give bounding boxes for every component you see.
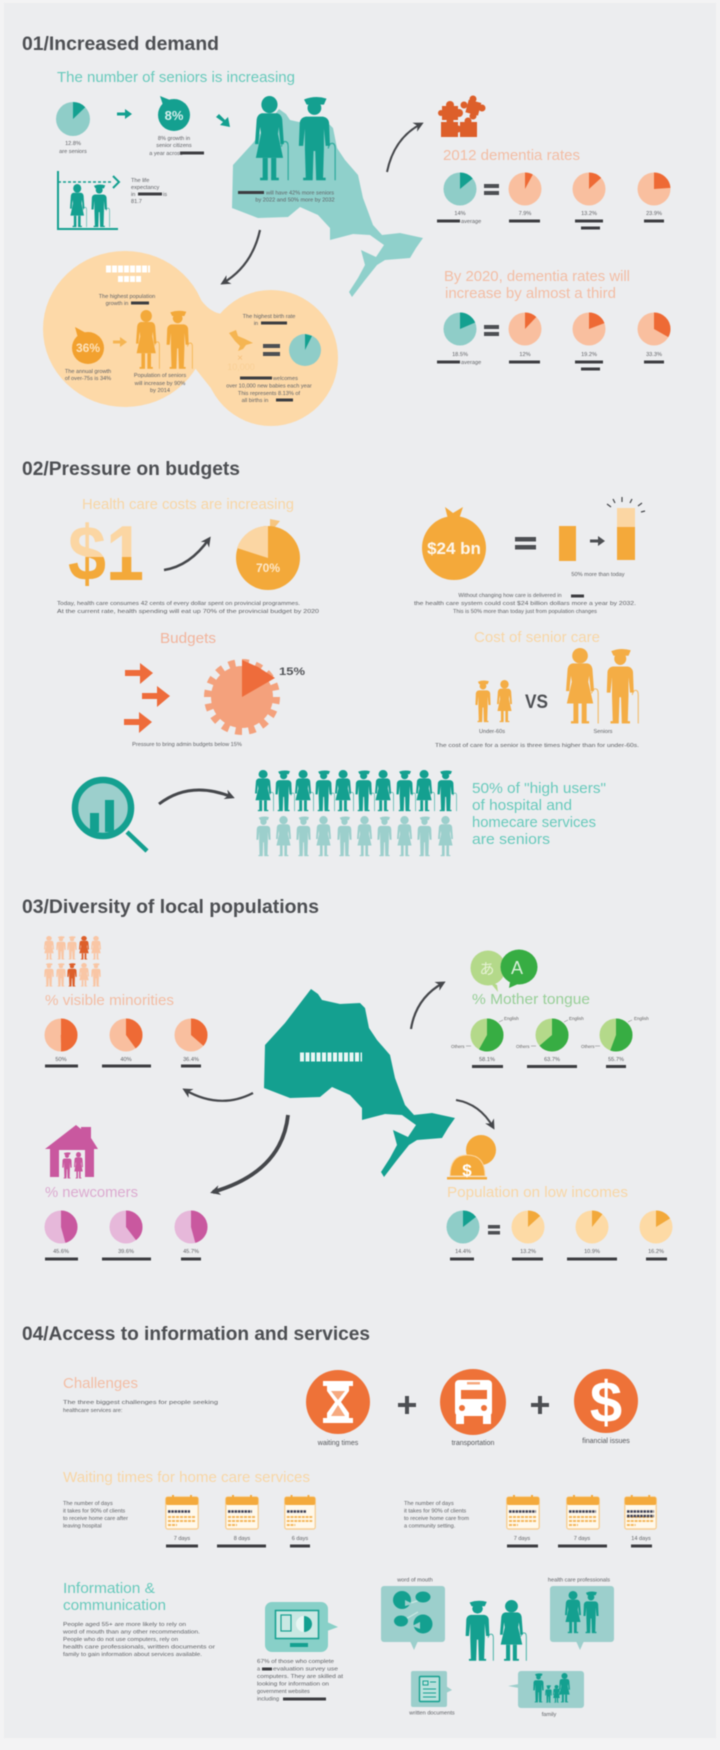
subheading: Budgets: Budgets bbox=[160, 630, 216, 647]
row: seniors highlighted bbox=[255, 770, 457, 811]
text: days after hospital bbox=[63, 1501, 128, 1530]
map: Ontario with seniors bbox=[232, 96, 423, 297]
pie: 63.7%: Others bbox=[516, 1044, 530, 1049]
calendar: 7 days second: 7 days bbox=[574, 1536, 590, 1542]
pie: 55.7%: 55.7% bbox=[608, 1057, 624, 1063]
equals sign bbox=[263, 344, 280, 356]
icon: senior figures bbox=[566, 648, 638, 735]
subheading: information and communication: communication bbox=[63, 1597, 166, 1614]
pie: 50%: 50% bbox=[55, 1057, 67, 1063]
text: days from community: The number of days bbox=[404, 1501, 454, 1507]
arrow: to minorities bbox=[185, 1090, 253, 1101]
subheading: mother tongue: % Mother tongue bbox=[472, 991, 590, 1008]
callout: 8% growth: senior citizens bbox=[156, 143, 192, 149]
chart: life expectancy: in bbox=[131, 192, 135, 198]
icon: under-60s figures: Under-60s bbox=[479, 729, 505, 735]
icon: monitor bubble bbox=[265, 1602, 338, 1652]
text: computers survey: evaluation survey use bbox=[273, 1666, 338, 1672]
text: information paragraph bbox=[62, 1622, 215, 1658]
pie: 63.7%: English bbox=[569, 1016, 584, 1021]
heading: 01 Increased demand: 01/Increased demand bbox=[22, 34, 219, 55]
chart: life expectancy: is bbox=[163, 192, 167, 198]
text: information paragraph: health care professionals, written documents or bbox=[63, 1644, 215, 1650]
symbol: plus bbox=[398, 1396, 416, 1414]
row: newcomers pies bbox=[44, 1210, 208, 1260]
pie: 13.2% bbox=[512, 1210, 544, 1260]
text: high users bbox=[472, 780, 606, 848]
text: days from community bbox=[404, 1501, 469, 1530]
callout: 8% growth bbox=[149, 96, 204, 157]
map: Ontario dark bbox=[264, 989, 455, 1177]
bubble: written documents: written documents bbox=[408, 1710, 455, 1716]
panel: regional population blob: growth in bbox=[106, 301, 128, 307]
text: information paragraph: People who do not use computers, rely on bbox=[63, 1637, 178, 1643]
text: information paragraph: word of mouth than any other recommendation. bbox=[62, 1630, 201, 1636]
chart: 50% more bars bbox=[559, 497, 645, 578]
text: computers survey: a bbox=[257, 1666, 261, 1672]
arrows: pressure bbox=[124, 663, 170, 733]
bubble: health care professionals bbox=[548, 1578, 614, 1650]
calendar: 7 days bbox=[166, 1495, 198, 1548]
pie: 12%: 12% bbox=[519, 352, 531, 358]
pie: 13.2% bbox=[572, 172, 606, 230]
text: high users: are seniors bbox=[472, 831, 550, 848]
pie: 12.8% are seniors bbox=[56, 102, 90, 155]
pie: provincial average bbox=[437, 172, 481, 225]
icon: magnifier with bars bbox=[75, 780, 147, 851]
panel: regional population blob bbox=[43, 251, 338, 426]
text: information paragraph: People aged 55+ are more likely to rely on bbox=[63, 1622, 186, 1628]
icon: house with newcomers bbox=[45, 1125, 98, 1180]
equals sign bbox=[484, 325, 499, 336]
icon: $24 bn money bag: $24 bn bbox=[427, 539, 481, 558]
icon: gear with 15% wedge bbox=[208, 660, 305, 731]
pie: 39.6% bbox=[102, 1210, 151, 1260]
icon: mother tongue bubbles: あ bbox=[479, 961, 495, 978]
pie: 36.4% bbox=[174, 1018, 208, 1068]
text: days after hospital: to receive home care after bbox=[63, 1516, 128, 1522]
pie: 23.9%: 23.9% bbox=[646, 211, 662, 217]
icon: waiting times hourglass bbox=[306, 1370, 370, 1447]
pie: 7.9% bbox=[508, 172, 542, 222]
arrow: teal diagonal bbox=[216, 114, 230, 127]
icon: gear with 15% wedge: 15% bbox=[279, 666, 305, 678]
subheading: number of seniors: The number of seniors is increasing bbox=[57, 69, 295, 86]
pie: 33.3%: 33.3% bbox=[646, 352, 662, 358]
panel: regional population blob: welcomes bbox=[272, 376, 298, 382]
subheading: by 2020 dementia bbox=[444, 268, 630, 302]
pie: 12.8% are seniors: 12.8% bbox=[65, 141, 81, 147]
map: Ontario with seniors: will have 42% more seniors bbox=[265, 190, 334, 196]
chart: 50% more bars: 50% more than today bbox=[571, 572, 625, 578]
panel: regional population blob: This represents 8.13% of bbox=[238, 391, 301, 397]
map: Ontario with seniors: by 2022 and 50% more by 2032 bbox=[255, 198, 335, 204]
pie: 55.7%: Others bbox=[581, 1044, 595, 1049]
icon: people visible minorities bbox=[44, 936, 101, 987]
subheading: waiting times: Waiting times for home care services bbox=[63, 1469, 310, 1486]
pie: 63.7% bbox=[516, 1016, 584, 1068]
pie: 39.6%: 39.6% bbox=[118, 1249, 134, 1255]
arrow: to high users bbox=[159, 790, 232, 804]
caption: admin budgets: Pressure to bring admin budgets below 15% bbox=[132, 742, 242, 748]
icon: financial issues: financial issues bbox=[582, 1438, 630, 1445]
equals sign bbox=[515, 537, 536, 550]
bubble: family bbox=[508, 1671, 584, 1718]
callout: 36% bbox=[72, 327, 104, 364]
figure: $1 two-tone: $1 bbox=[68, 509, 144, 597]
icon: waiting times hourglass: waiting times bbox=[317, 1440, 359, 1447]
calendar: 7 days community: 7 days bbox=[514, 1536, 530, 1542]
icon: coins bbox=[447, 1135, 496, 1180]
label: VS: VS bbox=[525, 692, 548, 713]
icon: financial issues: $ bbox=[590, 1370, 622, 1435]
panel: regional population blob: The annual growth bbox=[65, 369, 111, 375]
arrow: up to 70% bbox=[164, 539, 209, 570]
icon: transportation bus bbox=[440, 1369, 506, 1447]
symbol: plus bbox=[531, 1396, 549, 1414]
caption: $24 billion: This is 50% more than today just from population changes bbox=[453, 609, 597, 615]
text: days after hospital: leaving hospital bbox=[63, 1524, 102, 1530]
heading: 04 Access: 04/Access to information and services bbox=[22, 1324, 370, 1345]
icon: puzzle pieces bbox=[438, 96, 486, 137]
subheading: cost of senior care: Cost of senior care bbox=[474, 629, 600, 646]
subheading: by 2020 dementia: increase by almost a third bbox=[445, 285, 616, 302]
pie: provincial average: average bbox=[461, 219, 481, 225]
callout: 8% growth: a year across bbox=[149, 151, 183, 157]
equals sign bbox=[488, 1225, 500, 1234]
bubble: word of mouth: word of mouth bbox=[396, 1578, 433, 1584]
pie: 19.2%: 19.2% bbox=[581, 352, 597, 358]
text: high users: homecare services bbox=[472, 814, 596, 831]
callout: 36%: 36% bbox=[76, 341, 100, 355]
pie: 10.9% bbox=[567, 1210, 617, 1260]
calendar: 8 days: 8 days bbox=[234, 1536, 250, 1542]
pie: 45.6%: 45.6% bbox=[53, 1249, 69, 1255]
calendar: 14 days bbox=[625, 1495, 656, 1548]
pie: 23.9% bbox=[638, 172, 670, 222]
icon: mother tongue bubbles bbox=[470, 950, 538, 992]
chart: life expectancy: The life bbox=[131, 178, 149, 184]
bubble: written documents bbox=[408, 1671, 455, 1716]
arrow: to low incomes bbox=[456, 1100, 493, 1127]
pie: births bbox=[289, 334, 321, 366]
panel: regional population blob: all births in bbox=[242, 398, 268, 404]
subheading: challenges: Challenges bbox=[63, 1375, 138, 1392]
panel: regional population blob: 10,000 bbox=[227, 362, 255, 372]
calendar: 8 days bbox=[217, 1495, 266, 1548]
icon: orange seniors bbox=[136, 310, 192, 369]
text: computers survey: looking for information on bbox=[257, 1682, 329, 1688]
pie: 33.3% bbox=[638, 312, 670, 364]
callout: 8% growth: 8% growth in bbox=[158, 136, 190, 142]
pie: 63.7%: 63.7% bbox=[544, 1057, 560, 1063]
pie: 70% of budget: 70% bbox=[256, 561, 280, 575]
icon: central seniors bbox=[466, 1600, 526, 1661]
text: high users: 50% of "high users" bbox=[472, 780, 606, 797]
row: others faded bbox=[256, 816, 453, 856]
caption: cost of care: The cost of care for a senior is three times higher than for under-60s. bbox=[435, 743, 640, 749]
figure: $1 two-tone: $1 bbox=[68, 509, 144, 597]
pie: 13.2%: 13.2% bbox=[520, 1249, 536, 1255]
pie: 45.6% bbox=[44, 1210, 78, 1260]
text: computers survey bbox=[257, 1659, 344, 1702]
heading: 02 Pressure on budgets: 02/Pressure on budgets bbox=[22, 459, 240, 480]
pie: 13.2%: 13.2% bbox=[581, 211, 597, 217]
calendar: 7 days second bbox=[558, 1495, 607, 1548]
panel: regional population blob: will increase by 90% bbox=[134, 381, 185, 387]
heading: 03 Diversity: 03/Diversity of local populations bbox=[22, 897, 319, 918]
pie: provincial average 2020: average bbox=[461, 360, 481, 366]
pie: 7.9%: 7.9% bbox=[519, 211, 531, 217]
arrow: map to region blob bbox=[223, 230, 260, 283]
text: days from community: a community setting. bbox=[404, 1524, 456, 1530]
icon: coins: $ bbox=[462, 1161, 472, 1180]
icon: mother tongue bubbles: A bbox=[511, 958, 523, 978]
caption: $24 billion: the health care system could cost $24 billion dollars more a year by 2032. bbox=[414, 601, 637, 607]
pie: 16.2%: 16.2% bbox=[648, 1249, 664, 1255]
panel: regional population blob: × bbox=[237, 353, 243, 364]
pie: 36.4%: 36.4% bbox=[183, 1057, 199, 1063]
icon: financial issues bbox=[574, 1369, 638, 1445]
text: challenges intro bbox=[63, 1400, 218, 1414]
caption: $24 billion: Without changing how care is delivered in bbox=[458, 593, 562, 599]
text: days after hospital: The number of days bbox=[63, 1501, 113, 1507]
panel: regional population blob: by 2014 bbox=[150, 388, 170, 394]
caption: health budget: At the current rate, health spending will eat up 70% of the provincial budget by 2020 bbox=[57, 609, 319, 615]
equals sign bbox=[484, 184, 499, 195]
pie: 58.1%: English bbox=[504, 1016, 519, 1021]
text: computers survey: including bbox=[257, 1696, 279, 1702]
bubble: health care professionals: health care professionals bbox=[548, 1578, 610, 1584]
callout: 8% growth: 8% bbox=[165, 108, 184, 123]
chart: 50% icon array bbox=[255, 770, 457, 856]
text: days after hospital: it takes for 90% of clients bbox=[63, 1508, 125, 1514]
subheading: information and communication: Information & bbox=[63, 1580, 155, 1597]
calendar: 6 days bbox=[285, 1495, 315, 1548]
calendar: 7 days: 7 days bbox=[174, 1536, 190, 1542]
calendar: 6 days: 6 days bbox=[292, 1536, 308, 1542]
panel: regional population blob: in bbox=[254, 321, 258, 327]
calendar: 14 days: 14 days bbox=[631, 1536, 651, 1542]
arrow: orange bbox=[113, 337, 127, 347]
text: challenges intro: healthcare services are: bbox=[63, 1408, 123, 1414]
pie: 55.7% bbox=[581, 1016, 649, 1068]
pie: 12% bbox=[508, 312, 542, 364]
pie: 10.9%: 10.9% bbox=[584, 1249, 600, 1255]
pie: provincial average 2020: 18.5% bbox=[452, 352, 468, 358]
pie: 55.7%: English bbox=[634, 1016, 649, 1021]
bubble: family: family bbox=[542, 1712, 557, 1718]
subheading: visible minorities: % visible minorities bbox=[45, 992, 174, 1009]
panel: regional population blob: over 10,000 new babies each year bbox=[226, 384, 312, 390]
subheading: information and communication bbox=[63, 1580, 166, 1614]
pie: provincial average 2020 bbox=[437, 312, 481, 366]
subheading: 2012 dementia rates: 2012 dementia rates bbox=[443, 147, 580, 164]
subheading: by 2020 dementia: By 2020, dementia rates will bbox=[444, 268, 630, 285]
chart: life expectancy: expectancy bbox=[131, 185, 159, 191]
subheading: newcomers: % newcomers bbox=[45, 1184, 138, 1201]
pie: 58.1%: Others bbox=[451, 1044, 465, 1049]
icon: $24 bn money bag bbox=[422, 507, 486, 580]
text: information paragraph: family to gain information about services available. bbox=[63, 1652, 202, 1658]
pie: 40%: 40% bbox=[120, 1057, 132, 1063]
chart: life expectancy: 81.7 bbox=[131, 199, 142, 205]
row: visible minorities pies bbox=[44, 1018, 208, 1068]
row: mother tongue pies bbox=[451, 1016, 649, 1068]
text: computers survey: government websites bbox=[257, 1689, 310, 1695]
subheading: low incomes: Population on low incomes bbox=[447, 1184, 628, 1201]
pie: 19.2% bbox=[572, 312, 606, 370]
pie: 58.1% bbox=[451, 1016, 519, 1068]
pie: 58.1%: 58.1% bbox=[479, 1057, 495, 1063]
icon: transportation bus: transportation bbox=[452, 1440, 495, 1447]
pie: 12.8% are seniors: are seniors bbox=[59, 149, 87, 155]
text: computers survey: 67% of those who complete bbox=[257, 1659, 334, 1665]
icon: stork bbox=[229, 330, 253, 351]
pie: 45.7%: 45.7% bbox=[183, 1249, 199, 1255]
caption: health budget bbox=[57, 601, 319, 615]
pie: 70% of budget bbox=[236, 519, 300, 590]
row: low income pies bbox=[446, 1210, 672, 1260]
panel: regional population blob: of over-75s is 34% bbox=[65, 376, 111, 382]
pie: 14.4% bbox=[446, 1210, 480, 1260]
row: 2012 dementia pies bbox=[437, 172, 670, 230]
caption: $24 billion bbox=[414, 593, 637, 615]
pie: provincial average: 14% bbox=[454, 211, 466, 217]
row: 2020 dementia pies bbox=[437, 312, 670, 370]
text: days from community: to receive home care from bbox=[404, 1516, 469, 1522]
panel: regional population blob: The highest birth rate bbox=[243, 314, 295, 320]
chart: life expectancy bbox=[58, 171, 167, 229]
text: days from community: it takes for 90% of clients bbox=[404, 1508, 466, 1514]
icon: under-60s figures bbox=[475, 680, 512, 735]
calendar: 7 days community bbox=[507, 1495, 539, 1548]
figure: $1 two-tone bbox=[68, 522, 143, 587]
arrow: teal right bbox=[117, 109, 132, 119]
pie: 40% bbox=[102, 1018, 151, 1068]
panel: regional population blob: Population of seniors bbox=[134, 373, 186, 379]
arrow: map to dementia bbox=[387, 124, 421, 172]
text: challenges intro: The three biggest challenges for people seeking bbox=[63, 1400, 218, 1406]
bubble: word of mouth bbox=[381, 1578, 445, 1650]
panel: regional population blob: The highest population bbox=[99, 294, 155, 300]
arrow: to newcomers bbox=[213, 1115, 288, 1192]
pie: 16.2% bbox=[640, 1210, 672, 1260]
icon: senior figures: Seniors bbox=[594, 729, 613, 735]
text: computers survey: computers. They are skilled at bbox=[257, 1674, 344, 1680]
pie: 50% bbox=[44, 1018, 78, 1068]
caption: health budget: Today, health care consumes 42 cents of every dollar spent on provincial programmes. bbox=[57, 601, 300, 607]
arrow: to mother tongue bbox=[411, 983, 443, 1029]
pie: 14.4%: 14.4% bbox=[455, 1249, 471, 1255]
subheading: health care costs: Health care costs are increasing bbox=[82, 496, 294, 513]
pie: 45.7% bbox=[174, 1210, 208, 1260]
text: high users: of hospital and bbox=[472, 797, 572, 814]
